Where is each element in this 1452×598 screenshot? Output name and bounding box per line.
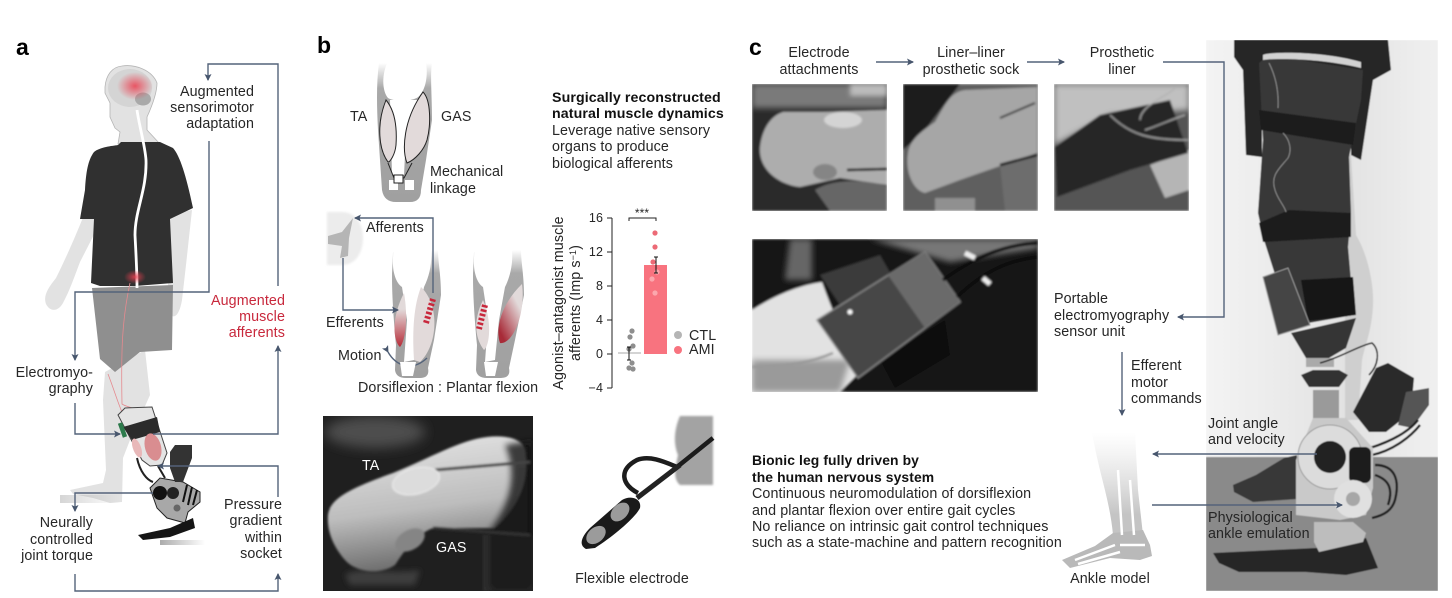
cable	[1320, 343, 1377, 375]
arrow: adaptation to EMG	[75, 141, 209, 360]
label: neurally controlled joint torque: Neurally	[40, 515, 94, 531]
label: pressure gradient: within	[244, 530, 282, 546]
arrow 2	[1027, 61, 1064, 63]
carbon foot	[138, 518, 195, 540]
arrow: pressure gradient	[158, 466, 278, 497]
y tick labels: 12	[589, 245, 603, 259]
label: augmented muscle afferents: Augmented	[211, 293, 285, 309]
wires and pylon	[137, 458, 165, 482]
label efferent motor commands: commands	[1131, 391, 1202, 407]
label efferent motor commands: motor	[1131, 375, 1168, 391]
electrode tail	[637, 465, 680, 498]
pivot	[174, 504, 180, 512]
label: neurally controlled joint torque: controlled	[30, 532, 93, 548]
limb shell	[377, 63, 432, 202]
linkage	[388, 163, 412, 178]
photo: electrodes on residual limb	[323, 416, 533, 591]
label: augmented sensorimotor adaptation: sensorimotor	[170, 100, 254, 116]
electrode pads	[607, 499, 633, 525]
arrow: joint torque	[75, 493, 153, 511]
muscle	[130, 431, 164, 463]
grey shorts	[92, 285, 173, 372]
y tick labels	[589, 211, 603, 395]
lumbar glow	[124, 270, 146, 284]
text block: bionic leg	[752, 452, 1062, 551]
label prosthetic liner: liner	[1108, 62, 1136, 78]
label liner: Liner–liner	[937, 45, 1005, 61]
label flexible electrode: Flexible electrode	[575, 571, 689, 587]
bones	[1075, 470, 1145, 564]
foot	[1062, 530, 1152, 568]
photo: portable sensor unit	[752, 239, 1038, 392]
label joint angle: Joint angle	[1208, 416, 1278, 432]
arms	[45, 210, 192, 316]
y axis title line 2: −1	[568, 250, 578, 260]
label mechanical linkage: linkage	[430, 181, 476, 197]
label: augmented muscle afferents: muscle	[239, 309, 285, 325]
label: pressure gradient: Pressure	[224, 497, 282, 513]
CTL mean	[618, 352, 641, 354]
arrow: liner to sensor	[1163, 62, 1224, 317]
arrow: efferents	[343, 258, 398, 310]
carbon socket	[1291, 318, 1356, 358]
error bars	[627, 257, 658, 360]
panel label b: b	[317, 32, 331, 58]
label electrode attachments: Electrode	[788, 45, 850, 61]
dark electronics	[1349, 447, 1371, 483]
foot shadow	[160, 540, 205, 545]
label flexion: Dorsiflexion : Plantar flexion	[358, 380, 538, 396]
photo: flexible electrode	[582, 416, 713, 549]
photo: bionic leg	[1206, 40, 1438, 591]
cable on sleeve	[1269, 63, 1290, 212]
lower leg	[1092, 432, 1143, 535]
sensor board	[1263, 268, 1310, 335]
arrow: joint angle	[1153, 453, 1317, 455]
prosthetic socket	[118, 407, 167, 466]
label GAS on photo: GAS	[436, 540, 466, 556]
text block: muscle dynamics: natural muscle dynamics	[552, 106, 724, 122]
motor disc	[153, 486, 167, 500]
text block: bionic leg: such as a state-machine and pattern recognition	[752, 535, 1062, 551]
y tick labels: 8	[596, 279, 603, 293]
head and neck	[105, 66, 160, 144]
label: pressure gradient: socket	[240, 546, 282, 562]
text block: muscle dynamics	[552, 90, 724, 172]
shoe	[1233, 455, 1297, 502]
ground shadow	[60, 495, 120, 503]
text block: muscle dynamics: Surgically reconstructed	[552, 90, 721, 106]
y tick labels: 4	[596, 313, 603, 327]
label joint angle: and velocity	[1208, 432, 1285, 448]
ends	[389, 180, 414, 190]
real leg	[1345, 155, 1373, 420]
y axis title: Agonist–antagonist muscle	[551, 216, 567, 390]
text block: bionic leg: Bionic leg fully driven by	[752, 452, 919, 468]
panel b: muscle dynamics	[317, 32, 724, 591]
arrow: afferents to adaptation	[208, 64, 278, 286]
photo: prosthetic sock	[903, 84, 1038, 211]
actuator hub	[1346, 492, 1360, 506]
tibia	[390, 100, 420, 175]
silver foot	[1314, 522, 1366, 552]
significance stars: ***	[635, 206, 649, 220]
label: augmented muscle afferents: afferents	[229, 325, 285, 341]
motor disc	[1298, 425, 1362, 489]
label: neurally controlled joint torque: joint torque	[20, 548, 93, 564]
significance bracket	[629, 218, 656, 221]
ankle model	[1062, 432, 1152, 568]
linkage box	[394, 175, 403, 183]
AMI bar	[644, 265, 667, 354]
photo: electrode attachments	[752, 84, 887, 211]
label sensor unit: Portable	[1054, 291, 1108, 307]
AMI points	[649, 230, 660, 296]
foot plate	[1213, 538, 1378, 575]
velcro strap	[1259, 110, 1356, 145]
label sensor unit: sensor unit	[1054, 324, 1125, 340]
ankle joint	[150, 478, 200, 523]
pylon	[1313, 390, 1339, 418]
label physiological ankle emulation: Physiological	[1208, 510, 1293, 526]
label liner: prosthetic sock	[923, 62, 1020, 78]
y axis title line 2: )	[568, 245, 584, 250]
TA muscle	[380, 100, 396, 162]
cerebellum	[135, 92, 151, 106]
arrow: ankle emulation	[1152, 504, 1342, 506]
floor	[1206, 457, 1438, 591]
CTL points	[626, 328, 636, 372]
panel label c: c	[749, 34, 762, 60]
text block: muscle dynamics: organs to produce	[552, 139, 669, 155]
label electrode attachments: attachments	[780, 62, 858, 78]
arrow: torque to pressure	[75, 574, 278, 591]
text block: muscle dynamics: Leverage native sensory	[552, 123, 711, 139]
dorsiflexion leg	[388, 250, 441, 378]
text block: bionic leg: Continuous neuromodulation of dorsiflexion	[752, 486, 1031, 502]
sleeve	[1258, 55, 1363, 325]
label: pressure gradient: gradient	[230, 513, 282, 529]
nerve	[108, 283, 146, 416]
label efferent motor commands: Efferent	[1131, 358, 1182, 374]
label GAS: GAS	[441, 109, 472, 125]
arrow: efferent commands	[1121, 352, 1123, 415]
blurred image content	[325, 416, 533, 591]
label: electromyography: Electromyo-	[16, 365, 93, 381]
wire bundle	[1370, 420, 1420, 518]
arrow: muscle to afferents	[153, 346, 278, 434]
cortex activation	[117, 72, 153, 100]
bar chart: agonist-antagonist afferents	[551, 206, 716, 395]
legend: AMI	[689, 342, 715, 358]
socket base	[1306, 358, 1334, 367]
actuator wheel	[1334, 480, 1372, 518]
control pcb	[1398, 388, 1429, 428]
legend	[674, 328, 716, 358]
electrode body	[582, 498, 640, 549]
adapter	[1301, 370, 1348, 387]
y tick labels: −4	[589, 381, 603, 395]
label TA: TA	[350, 109, 368, 125]
second motor	[167, 487, 179, 499]
plantar flexion leg	[473, 250, 524, 378]
leg diagram: AMI construct	[377, 63, 432, 202]
ribbon loop	[624, 438, 713, 493]
battery	[1353, 363, 1414, 432]
label efferents: Efferents	[326, 315, 384, 331]
label ankle model: Ankle model	[1070, 571, 1150, 587]
label TA on photo: TA	[362, 458, 380, 474]
label afferents: Afferents	[366, 220, 424, 236]
spinal cord cross-section	[327, 212, 363, 265]
arrow 1	[876, 61, 913, 63]
black t-shirt	[80, 142, 193, 286]
panel a: closed-loop walking figure	[16, 34, 285, 591]
femur	[383, 63, 427, 101]
label prosthetic liner: Prosthetic	[1090, 45, 1154, 61]
photo: prosthetic liner	[1054, 84, 1189, 211]
strap	[1301, 277, 1356, 321]
wall	[1206, 40, 1438, 458]
standing leg and foot	[70, 350, 150, 503]
y axis	[607, 218, 612, 388]
ankle body	[1296, 418, 1373, 520]
text block: bionic leg: and plantar flexion over entire gait cycles	[752, 503, 1015, 519]
lower velcro strap	[1259, 210, 1351, 242]
photo background	[323, 416, 533, 591]
text block: bionic leg: the human nervous system	[752, 469, 934, 485]
label physiological ankle emulation: ankle emulation	[1208, 526, 1310, 542]
legend: CTL	[689, 328, 716, 344]
spinal cord	[135, 110, 146, 288]
green electrode	[120, 423, 125, 437]
disc centre	[1314, 441, 1346, 473]
label: electromyography: graphy	[49, 381, 94, 397]
waist band	[1263, 53, 1361, 68]
arrow: EMG to socket	[75, 403, 120, 434]
label: augmented sensorimotor adaptation: Augmented	[180, 84, 254, 100]
GAS muscle	[404, 92, 430, 163]
fingers	[675, 416, 713, 485]
text block: muscle dynamics: biological afferents	[552, 156, 673, 172]
panel label a: a	[16, 34, 29, 60]
label sensor unit: electromyography	[1054, 308, 1170, 324]
y tick labels: 0	[596, 347, 603, 361]
text block: bionic leg: No reliance on intrinsic gait control techniques	[752, 519, 1048, 535]
springs	[183, 485, 197, 505]
y tick labels: 16	[589, 211, 603, 225]
brain region	[108, 69, 152, 107]
socket band	[123, 417, 160, 440]
illustration: person with bionic leg	[45, 66, 205, 545]
y axis title line 2: afferents (Imp s	[568, 260, 584, 361]
panel c: bionic leg system	[749, 34, 1438, 591]
shorts	[1234, 40, 1391, 160]
arrow: afferents	[355, 218, 433, 293]
battery	[170, 445, 192, 482]
label mechanical linkage: Mechanical	[430, 164, 503, 180]
label: augmented sensorimotor adaptation: adaptation	[186, 116, 254, 132]
label motion: Motion	[338, 348, 382, 364]
